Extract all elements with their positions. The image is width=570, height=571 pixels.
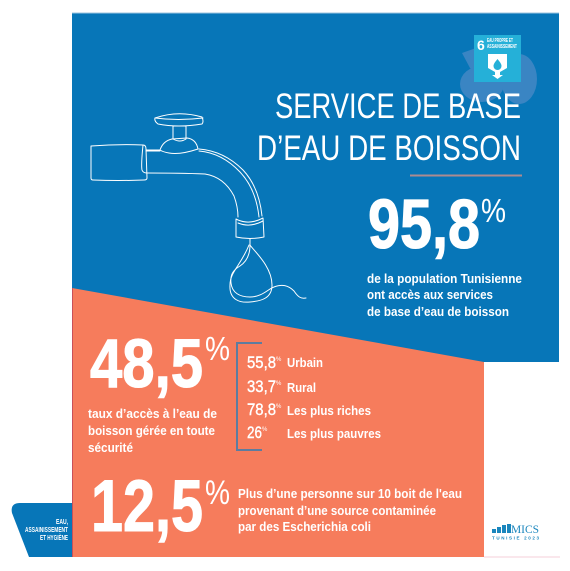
row: rural: Rural [287, 380, 316, 395]
text: E. coli contamination [238, 486, 462, 534]
row: plus riches: Les plus riches [287, 403, 371, 418]
row: plus riches: 78,8 [247, 400, 276, 419]
logo: MICS Tunisie 2023: TUNISIE 2023 [492, 536, 539, 540]
stat: 12,5%: % [205, 474, 230, 512]
row: plus riches [247, 400, 371, 419]
divider under title [410, 174, 522, 176]
bracket [237, 343, 262, 450]
icon: SDG 6 badge: 6 [477, 37, 485, 53]
row: plus pauvres: Les plus pauvres [287, 426, 381, 441]
tab: section label: ET HYGIÈNE [40, 533, 68, 542]
stat: 48,5%: % [205, 330, 230, 367]
row: urbain: 55,8 [247, 353, 276, 372]
title [257, 87, 521, 168]
text: population served [367, 271, 522, 319]
text: population served: ont accès aux services [367, 287, 493, 302]
text: safely managed access: boisson gérée en toute [88, 423, 215, 438]
icon: faint background droplet shape [460, 48, 537, 104]
row: plus pauvres: % [262, 427, 268, 433]
text: E. coli contamination: provenant d’une source contaminée [238, 503, 436, 518]
text: population served: de la population Tunisienne [367, 271, 522, 286]
row: plus riches: % [276, 404, 282, 410]
text: E. coli contamination: par des Escherichia coli [238, 519, 371, 534]
row: rural [247, 377, 316, 396]
list: breakdown by group [247, 353, 381, 442]
text: E. coli contamination: Plus d’une personne sur 10 boit de l'eau [238, 486, 462, 501]
row: plus pauvres [247, 423, 381, 442]
logo: MICS Tunisie 2023: MICS [511, 522, 539, 536]
text: safely managed access: taux d’accès à l’eau de [88, 406, 217, 421]
icon: SDG 6 badge [474, 35, 521, 82]
tab: section label: ASSAINISSEMENT [25, 527, 68, 534]
icon: SDG 6 badge: EAU PROPRE ET [487, 38, 513, 44]
text: safely managed access: sécurité [88, 440, 133, 455]
row: rural: % [276, 381, 282, 387]
panel: blue background [72, 13, 559, 362]
text: safely managed access [88, 406, 217, 455]
row: urbain: Urbain [287, 355, 323, 370]
row: urbain [247, 353, 323, 372]
tab: section label: EAU, [56, 519, 68, 526]
text: population served: de base d’eau de boisson [367, 304, 509, 319]
stat: 95,8%: 95,8 [368, 185, 480, 263]
footer rule [484, 556, 560, 558]
row: rural: 33,7 [247, 377, 276, 396]
tab: section label [12, 503, 72, 557]
row: urbain: % [276, 357, 282, 363]
row: plus pauvres: 26 [247, 423, 262, 442]
icon: SDG 6 badge: ASSAINISSEMENT [487, 44, 517, 50]
stat: 48,5%: 48,5 [90, 325, 203, 402]
panel: orange section [72, 288, 484, 557]
icon: line-art faucet with water drop [91, 114, 306, 302]
stat: 12,5%: 12,5 [91, 466, 203, 547]
stat: 95,8%: % [481, 192, 506, 229]
logo: MICS Tunisie 2023 [492, 522, 539, 540]
